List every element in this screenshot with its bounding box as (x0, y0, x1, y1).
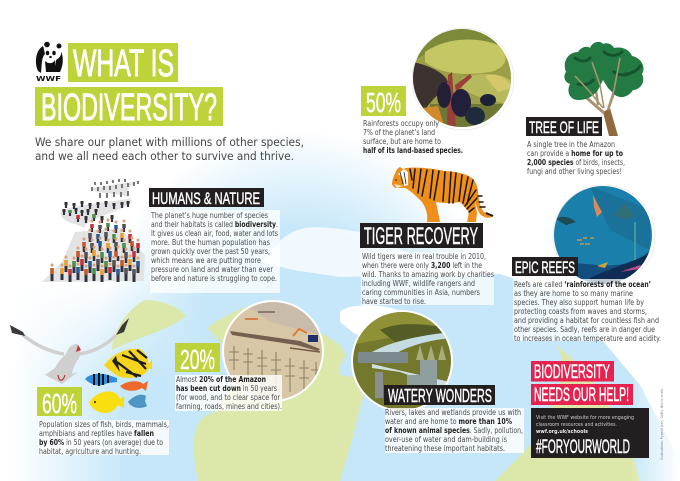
panel: humans and nature: pressure on land and water than ever (151, 265, 274, 274)
title: WHAT IS (73, 43, 174, 85)
panel: humans and nature: and their habitats is called biodiversity. (151, 220, 278, 229)
panel: watery wonders: threatening these important habitats. (385, 444, 505, 453)
panel: epic reefs: species. They also support human life by (514, 298, 644, 307)
panel: tree of life: fungi and other living species! (527, 167, 622, 176)
stat: 20% Amazon (175, 343, 282, 411)
panel: watery wonders: over-use of water and dam-building is (385, 435, 507, 444)
heading: biodiversity needs our help (531, 361, 633, 406)
panel: humans and nature: grown quickly over the past 50 years, (151, 247, 270, 256)
stat: 20% Amazon: 20% (180, 344, 215, 375)
panel: tiger recovery: Wild tigers were in real trouble in 2010, (362, 252, 486, 261)
panel: humans and nature (149, 188, 280, 293)
panel: humans and nature: The planet’s huge number of species (150, 211, 268, 220)
black box: WWF website (531, 408, 649, 458)
stat: 20% Amazon: has been cut down in 50 years (176, 384, 277, 393)
stat: 60% population (37, 387, 169, 456)
panel: call to action (531, 361, 649, 458)
subtitle: and we all need each other to survive and thrive. (35, 149, 294, 163)
logo: WWF panda: WWF (36, 75, 61, 83)
panel: humans and nature: which means we are putting more (151, 256, 261, 265)
panel: tiger recovery: when there were only 3,200 left in the (362, 261, 482, 270)
credit line: Illustrations: Pygent Josh, Getty. Not to scale. (660, 388, 664, 460)
panel: epic reefs: Reefs are called ‘rainforests of the ocean’ (514, 280, 651, 289)
heading: biodiversity needs our help: BIODIVERSITY (534, 362, 610, 383)
panel: tiger recovery: have started to rise. (362, 297, 426, 306)
stat: 60% population: Population sizes of fish, birds, mammals, (39, 420, 169, 429)
stat: 20% Amazon: (for wood, and to clear space for (176, 393, 281, 402)
stat: 50% rainforests: 50% (366, 87, 401, 118)
illustration: deforested Amazon circle (222, 300, 324, 402)
heading: TIGER RECOVERY (364, 223, 478, 250)
panel: epic reefs: as they are home to so many marine (514, 289, 633, 298)
stat: 60% population: habitat, agriculture and hunting. (39, 447, 141, 456)
stat: 60% population: by 60% in 50 years (on average) due to (39, 438, 163, 447)
stat: 50% rainforests: 7% of the planet’s land (363, 128, 435, 137)
stat: 20% Amazon: Almost 20% of the Amazon (176, 375, 266, 384)
black box: WWF website: classroom resources and activities. (536, 422, 617, 428)
illustration: tropical fish (85, 349, 152, 413)
heading: EPIC REEFS (515, 258, 575, 277)
stat: 50% rainforests: Rainforests occupy only (363, 119, 439, 128)
heading (512, 257, 578, 277)
illustration: reef circle (550, 185, 658, 290)
panel: watery wonders: Rivers, lakes and wetlands provide us with (385, 408, 521, 417)
panel: tree of life: 2,000 species of birds, insects, (527, 158, 625, 167)
panel: humans and nature: before and nature is struggling to cope. (151, 274, 277, 283)
panel: tiger recovery (360, 223, 494, 306)
panel: tree of life: can provide a home for up to (527, 149, 623, 158)
black box: WWF website: wwf.org.uk/schools (536, 429, 588, 435)
stat: 20% Amazon: farming, roads, mines and cities). (176, 402, 282, 411)
black box: WWF website: Visit the WWF website for more engaging (536, 415, 634, 421)
stat: 50% rainforests: half of its land-based species. (363, 146, 463, 155)
panel: watery wonders: of known animal species. Sadly, pollution, (385, 426, 523, 435)
illustration: tree (564, 42, 644, 136)
subtitle: We share our planet with millions of other species, (35, 135, 304, 149)
title (35, 43, 223, 129)
panel: humans and nature: more. But the human population has (151, 238, 270, 247)
panel: tree of life (526, 117, 625, 176)
panel: watery wonders: water and are home to more than 10% (385, 417, 512, 426)
stat: 50% rainforests: surface, but are home to (363, 137, 441, 146)
illustration: seabird (10, 318, 129, 384)
panel: epic reefs (512, 257, 661, 343)
panel: tiger recovery: wild. Thanks to amazing work by charities (362, 270, 494, 279)
illustration: crowd of people (42, 179, 145, 282)
panel: humans and nature: It gives us clean air, food, water and lots (151, 229, 278, 238)
panel: tree of life: A single tree in the Amazon (527, 140, 615, 149)
illustration: tiger (392, 167, 493, 222)
heading: TREE OF LIFE (529, 118, 599, 137)
heading: HUMANS & NATURE (152, 189, 260, 208)
stat: 50% rainforests (361, 86, 463, 155)
heading: WATERY WONDERS (388, 386, 492, 406)
illustration: rainforest circle (410, 25, 515, 130)
panel: epic reefs: protecting coasts from waves and storms, (514, 307, 647, 316)
stat: 60% population: 60% (42, 388, 77, 419)
panel: tiger recovery: caring communities in Asia, numbers (362, 288, 480, 297)
illustration: dam circle (351, 310, 453, 413)
panel: watery wonders (384, 385, 524, 453)
stat: 60% population: amphibians and reptiles have fallen (39, 429, 154, 438)
logo: WWF panda (36, 42, 64, 83)
title: BIODIVERSITY? (41, 87, 217, 129)
subtitle (35, 135, 304, 163)
panel: tiger recovery: including WWF, wildlife rangers and (362, 279, 475, 288)
